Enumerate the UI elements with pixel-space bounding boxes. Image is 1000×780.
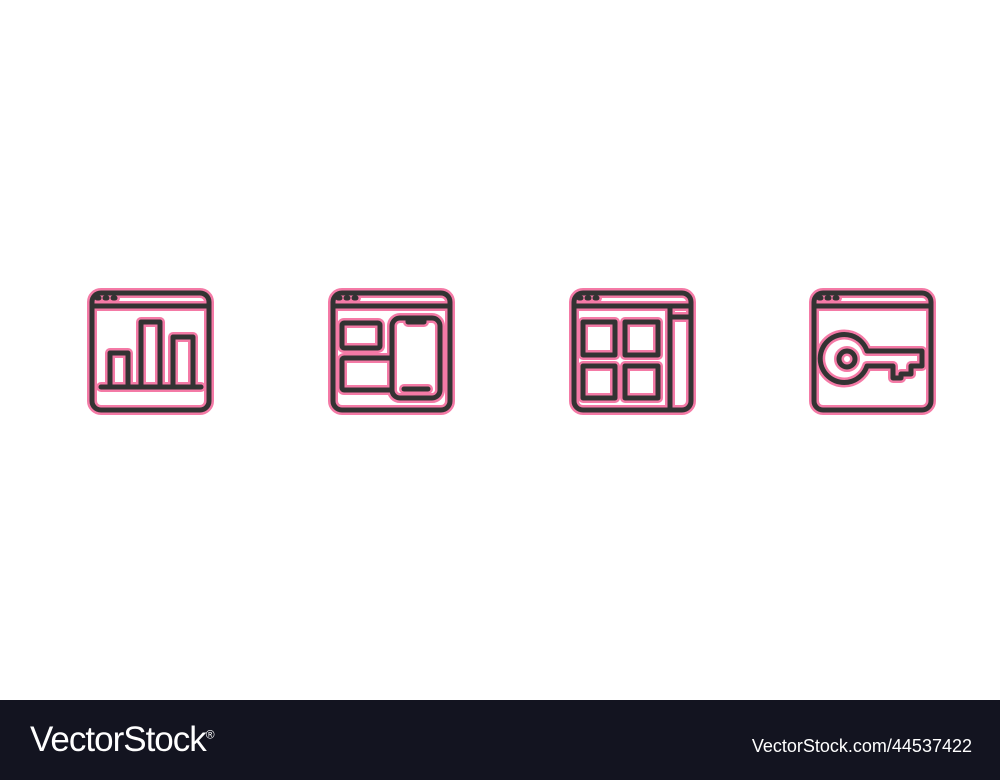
icon: browser with bar chart <box>87 288 214 415</box>
footer url text: VectorStock.com/44537422 <box>752 736 972 756</box>
icon: browser with key <box>809 288 936 415</box>
icon: browser with responsive layout and phone <box>328 288 455 415</box>
icon: browser with grid layout <box>569 288 696 415</box>
footer bar <box>0 700 1000 780</box>
footer logo text: VectorStock® <box>30 720 214 759</box>
